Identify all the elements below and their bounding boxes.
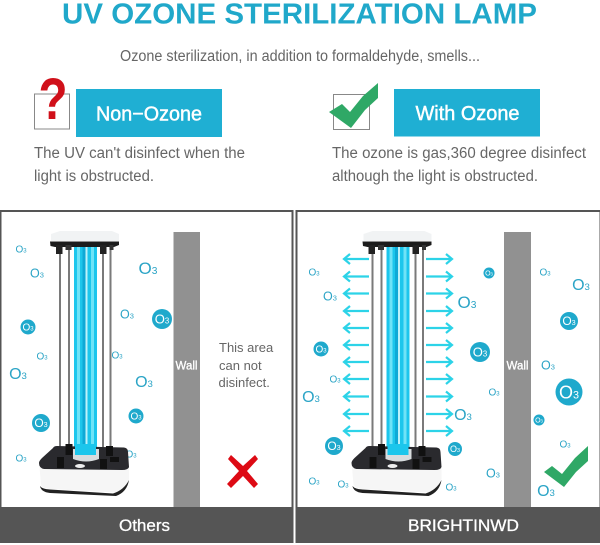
lamp xyxy=(352,231,442,496)
ozone molecules: O3 xyxy=(488,388,500,398)
ozone molecules: O3 xyxy=(562,314,576,328)
footer label: others xyxy=(1,507,293,542)
panel: brightinwd xyxy=(296,211,600,542)
ozone molecules: O3 xyxy=(323,290,337,304)
ozone molecules: O3 xyxy=(34,416,48,430)
button: non-ozone xyxy=(76,89,222,137)
text: with ozone description xyxy=(332,145,587,185)
icon: checkbox with green check xyxy=(329,83,378,130)
ozone molecules: O3 xyxy=(125,450,137,460)
ozone molecules: O3 xyxy=(559,382,579,402)
wall: Wall xyxy=(176,360,197,372)
footer label: others: Others xyxy=(119,516,170,535)
text: this area can not disinfect: can not xyxy=(219,358,262,373)
ozone molecules: O3 xyxy=(539,268,551,278)
button: with ozone xyxy=(394,89,540,136)
ozone molecules: O3 xyxy=(450,444,460,454)
ozone molecules: O3 xyxy=(36,352,48,362)
icon: green check xyxy=(544,446,588,487)
ozone molecules: O3 xyxy=(537,483,555,500)
ozone molecules: O3 xyxy=(454,407,472,424)
ozone molecules: O3 xyxy=(315,344,327,356)
ozone molecules: O3 xyxy=(473,344,487,360)
ozone molecules: O3 xyxy=(308,268,320,278)
arrows: ozone spreading left and right xyxy=(344,254,452,436)
ozone molecules: O3 xyxy=(572,277,590,294)
ozone molecules: O3 xyxy=(15,454,27,464)
ozone molecules: O3 xyxy=(135,374,153,391)
ozone molecules: O3 xyxy=(9,366,27,383)
text: non-ozone description xyxy=(34,145,245,185)
panel: others xyxy=(0,211,293,542)
ozone molecules: O3 xyxy=(15,244,27,256)
text: with ozone description: The ozone is gas,360 degree disinfect xyxy=(332,145,587,162)
ozone molecules: O3 xyxy=(327,439,341,453)
ozone molecules: O3 xyxy=(337,480,349,490)
ozone molecules: O3 xyxy=(130,412,142,422)
footer label: brightinwd: BRIGHTINWD xyxy=(408,516,519,535)
ozone molecules: O3 xyxy=(559,440,571,450)
ozone molecules: O3 xyxy=(485,270,494,278)
ozone molecules: O3 xyxy=(120,308,134,322)
ozone molecules: O3 xyxy=(535,418,544,424)
column: with ozone xyxy=(329,83,587,185)
wall: Wall xyxy=(507,360,528,372)
ozone molecules xyxy=(302,268,590,500)
button: non-ozone: Non−Ozone xyxy=(96,102,202,126)
text: non-ozone description: The UV can't disinfect when the xyxy=(34,145,245,162)
text: this area can not disinfect: disinfect. xyxy=(218,375,270,390)
footer label: brightinwd xyxy=(296,507,600,542)
button: with ozone: With Ozone xyxy=(416,102,520,125)
ozone molecules: O3 xyxy=(308,476,320,488)
ozone molecules: O3 xyxy=(541,358,555,372)
wall xyxy=(504,232,531,508)
ozone molecules xyxy=(9,244,172,464)
ozone molecules: O3 xyxy=(302,389,320,406)
ozone molecules: O3 xyxy=(155,312,169,326)
icon: red x xyxy=(227,455,258,488)
ozone molecules: O3 xyxy=(445,482,457,494)
ozone molecules: O3 xyxy=(111,350,123,362)
column: non-ozone xyxy=(34,68,245,185)
subtitle: Ozone sterilization, in addition to formaldehyde, smells... xyxy=(120,48,480,65)
lamp xyxy=(39,231,129,496)
wall xyxy=(174,232,200,508)
text: this area can not disinfect xyxy=(218,340,274,390)
ozone molecules: O3 xyxy=(458,293,477,312)
icon: checkbox with question mark: ? xyxy=(38,68,68,132)
ozone molecules: O3 xyxy=(30,266,44,280)
ozone molecules: O3 xyxy=(486,466,500,480)
text: this area can not disinfect: This area xyxy=(219,340,274,355)
ozone molecules: O3 xyxy=(22,322,34,334)
text: with ozone description: although the light is obstructed. xyxy=(332,168,538,185)
text: non-ozone description: light is obstructed. xyxy=(34,168,154,185)
ozone molecules: O3 xyxy=(139,259,158,278)
ozone molecules: O3 xyxy=(329,374,341,386)
